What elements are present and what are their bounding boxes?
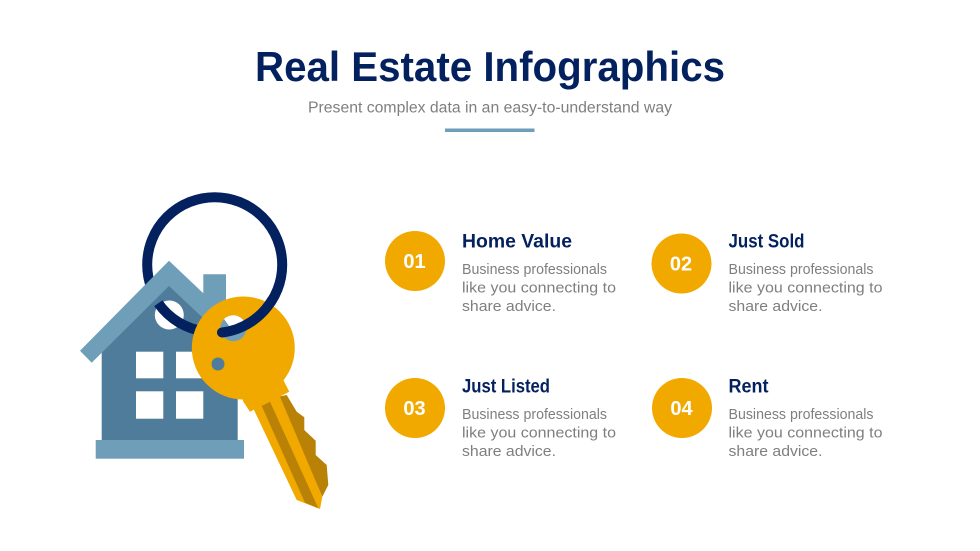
description: share advice. xyxy=(728,444,822,460)
description: Business professionals xyxy=(728,262,874,278)
item 02: just sold xyxy=(652,231,882,315)
number badge 02: 02 xyxy=(670,254,692,276)
number badge 03 xyxy=(385,378,445,438)
illustration: house keychain xyxy=(80,197,328,509)
heading: Just Sold xyxy=(728,231,804,252)
item 03: just listed xyxy=(385,376,616,460)
number badge 02 xyxy=(652,234,712,294)
title underline xyxy=(445,128,534,132)
description xyxy=(728,407,882,460)
icon: key ring over key xyxy=(222,300,272,332)
heading: Rent xyxy=(728,376,769,397)
description xyxy=(462,262,616,315)
description: like you connecting to xyxy=(728,280,882,296)
number badge 03: 03 xyxy=(403,398,426,420)
description: share advice. xyxy=(728,299,822,315)
description: like you connecting to xyxy=(462,280,616,296)
title: Real Estate Infographics xyxy=(255,43,725,90)
description: Business professionals xyxy=(462,407,607,423)
description: like you connecting to xyxy=(462,426,616,442)
description: Business professionals xyxy=(728,407,874,423)
number badge 01 xyxy=(385,231,445,291)
description xyxy=(728,262,882,315)
description: like you connecting to xyxy=(728,426,882,442)
number badge 04 xyxy=(652,378,712,438)
icon: key xyxy=(192,296,328,509)
item 04: rent xyxy=(652,376,882,460)
heading: Just Listed xyxy=(462,376,550,397)
subtitle: Present complex data in an easy-to-understand way xyxy=(308,100,672,116)
icon: key ring back section xyxy=(147,197,282,332)
number badge 01: 01 xyxy=(403,251,426,273)
description: share advice. xyxy=(462,444,556,460)
description: share advice. xyxy=(462,299,556,315)
icon: key ring over house xyxy=(158,303,205,332)
item 01: home value xyxy=(385,231,616,315)
description xyxy=(462,407,616,460)
heading: Home Value xyxy=(462,231,572,252)
description: Business professionals xyxy=(462,262,607,278)
icon: house xyxy=(80,261,244,459)
number badge 04: 04 xyxy=(670,398,693,420)
